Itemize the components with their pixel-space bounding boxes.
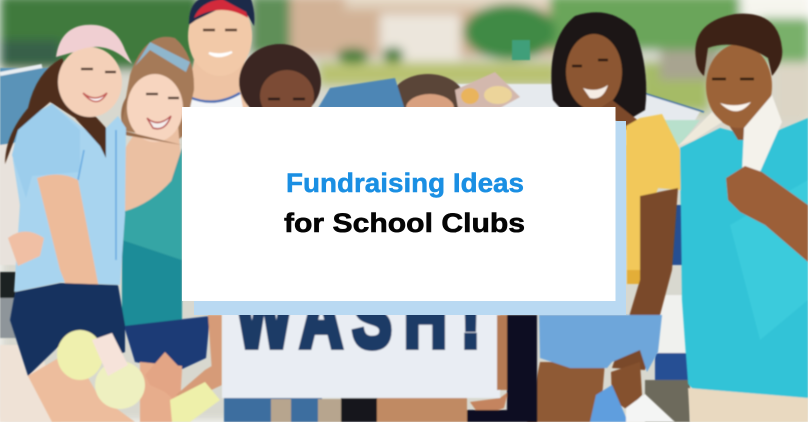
title line 1: Fundraising Ideas [286,168,524,198]
title line 2: for School Clubs [284,208,525,238]
person: woman with short dark hair [239,44,321,122]
person: girl with blonde hair and teal top [120,37,222,422]
panel shadow [194,121,626,315]
white title panel [182,107,616,301]
person: boy with red cap [186,0,405,110]
person: boy with towel and turquoise shirt [678,14,808,422]
car [440,84,700,145]
person: girl with pink cap [5,25,220,422]
person: girl with yellow shirt and denim shorts [527,12,681,422]
right car lower body [655,205,691,265]
person: hidden figure behind the panel [392,72,520,122]
left car [0,68,50,145]
sign [222,271,537,422]
sign lettering: WASH! [236,271,481,366]
